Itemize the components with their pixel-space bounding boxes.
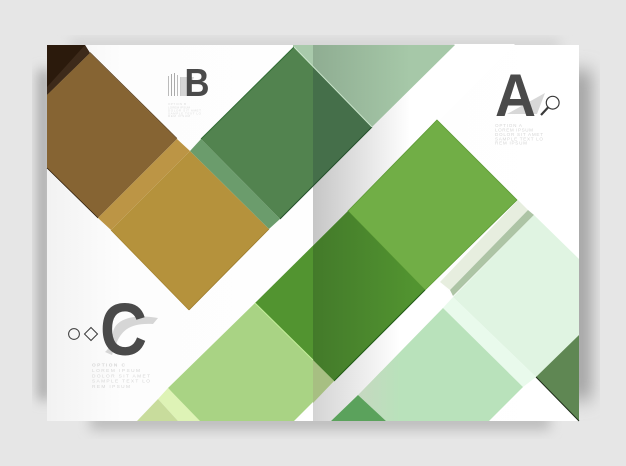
grey diagonal band	[313, 44, 515, 246]
panel: brown and gold tiles	[47, 45, 269, 310]
brown tile	[47, 53, 177, 218]
option C text	[92, 362, 150, 390]
option C text: OPTION C	[92, 362, 126, 368]
option A text: SAMPLE TEXT LO	[495, 136, 543, 141]
letter A: A	[495, 62, 536, 129]
letter C shadow	[105, 317, 158, 355]
mint tile	[358, 308, 523, 421]
option B block	[168, 62, 210, 118]
option A text: DOLOR SIT AMET	[495, 132, 543, 137]
beige strip	[440, 200, 528, 290]
light green tile	[168, 303, 334, 421]
option A text: REM IPSUM	[495, 141, 527, 146]
dark green tile	[201, 47, 372, 219]
pale green part left of fold	[293, 45, 313, 66]
panel: light green tiles	[137, 303, 334, 421]
white bottom notch	[297, 405, 313, 421]
folded part of dark green tile	[313, 66, 372, 186]
panel: pale tiles	[331, 200, 579, 421]
panel: dark green tiles	[190, 45, 455, 229]
option B text	[168, 102, 202, 118]
dark brown corner	[47, 45, 90, 95]
icon: diamond	[84, 328, 98, 340]
lime strip	[158, 388, 200, 421]
lighter corner strip	[47, 45, 90, 95]
gold strip	[98, 139, 190, 230]
option B text: DOLOR SIT AMET	[168, 108, 201, 112]
grey green strip	[450, 210, 534, 296]
letter C: C	[100, 288, 147, 371]
icon: grey bars and triangle	[168, 73, 194, 96]
icon: magnifier	[541, 96, 559, 115]
green bottom tile	[331, 395, 386, 421]
folded part of light green tile	[313, 360, 334, 403]
option B text: LOREM IPSUM	[168, 105, 190, 109]
gold tile	[111, 151, 269, 310]
panel: bright green tiles	[255, 120, 517, 381]
folded part of deep green tile	[313, 211, 425, 381]
option C block	[69, 288, 158, 390]
bright green tile	[348, 120, 517, 290]
very pale strip	[443, 297, 536, 387]
option C text: DOLOR SIT AMET	[92, 373, 150, 379]
lower grey diagonal band	[313, 281, 453, 421]
deep green tile	[255, 211, 425, 381]
option A block	[495, 62, 559, 146]
pale green tile	[453, 215, 579, 377]
option C text: REM IPSUM	[92, 384, 130, 390]
option B text: SAMPLE TEXT LO	[168, 111, 202, 115]
paper sheet	[47, 45, 579, 421]
option B text: REM IPSUM	[168, 114, 190, 118]
olive corner	[137, 399, 178, 421]
faded green strip	[190, 139, 280, 229]
option C text: LOREM IPSUM	[92, 368, 140, 374]
dark green right corner	[536, 335, 579, 421]
option A text	[495, 123, 543, 146]
pale green top triangle	[293, 45, 455, 127]
option A text: OPTION A	[495, 123, 523, 128]
letter B: B	[184, 62, 210, 105]
icon: circle	[69, 329, 79, 339]
option A text: LOREM IPSUM	[495, 127, 533, 132]
letter A shadow	[507, 93, 545, 114]
option B text: OPTION B	[168, 102, 186, 106]
paper shadow	[38, 40, 590, 430]
option C text: SAMPLE TEXT LO	[92, 379, 150, 385]
